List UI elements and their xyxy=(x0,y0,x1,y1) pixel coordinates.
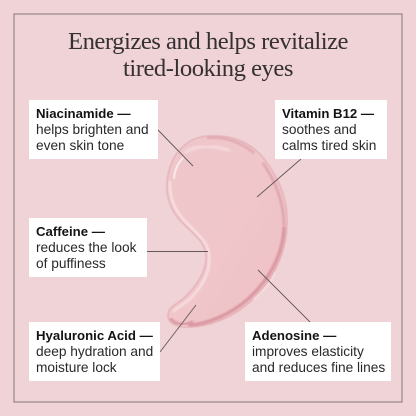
serum swatch xyxy=(167,136,287,327)
title: tired-looking eyes xyxy=(123,55,293,82)
callout: hyaluronic acid: deep hydration and xyxy=(36,344,153,359)
title: Energizes and helps revitalize xyxy=(68,28,348,55)
leader line: adenosine xyxy=(258,270,310,322)
callout: hyaluronic acid: Hyaluronic Acid — xyxy=(36,328,153,343)
leader line: vitamin b12 xyxy=(257,159,301,197)
callout: caffeine: Caffeine — xyxy=(36,224,105,239)
callout: caffeine: of puffiness xyxy=(36,256,106,271)
callout: niacinamide: even skin tone xyxy=(36,138,124,153)
callout: hyaluronic acid xyxy=(29,322,160,381)
callout: vitamin b12: soothes and xyxy=(282,122,357,137)
callout: hyaluronic acid: moisture lock xyxy=(36,360,117,375)
callout: adenosine: Adenosine — xyxy=(252,328,336,343)
callout: vitamin b12 xyxy=(275,100,387,159)
callout: caffeine: reduces the look xyxy=(36,240,136,255)
leader line: caffeine xyxy=(147,250,208,252)
callout: niacinamide: helps brighten and xyxy=(36,122,149,137)
leader line: niacinamide xyxy=(158,130,193,166)
callout: adenosine: and reduces fine lines xyxy=(252,360,385,375)
callout: niacinamide: Niacinamide — xyxy=(36,106,131,121)
callout: adenosine xyxy=(245,322,391,381)
leader line: hyaluronic acid xyxy=(160,305,196,352)
callout: adenosine: improves elasticity xyxy=(252,344,364,359)
callout: vitamin b12: Vitamin B12 — xyxy=(282,106,374,121)
callout: niacinamide xyxy=(29,100,158,159)
title xyxy=(68,28,348,82)
callout: caffeine xyxy=(29,218,147,277)
callout: vitamin b12: calms tired skin xyxy=(282,138,376,153)
